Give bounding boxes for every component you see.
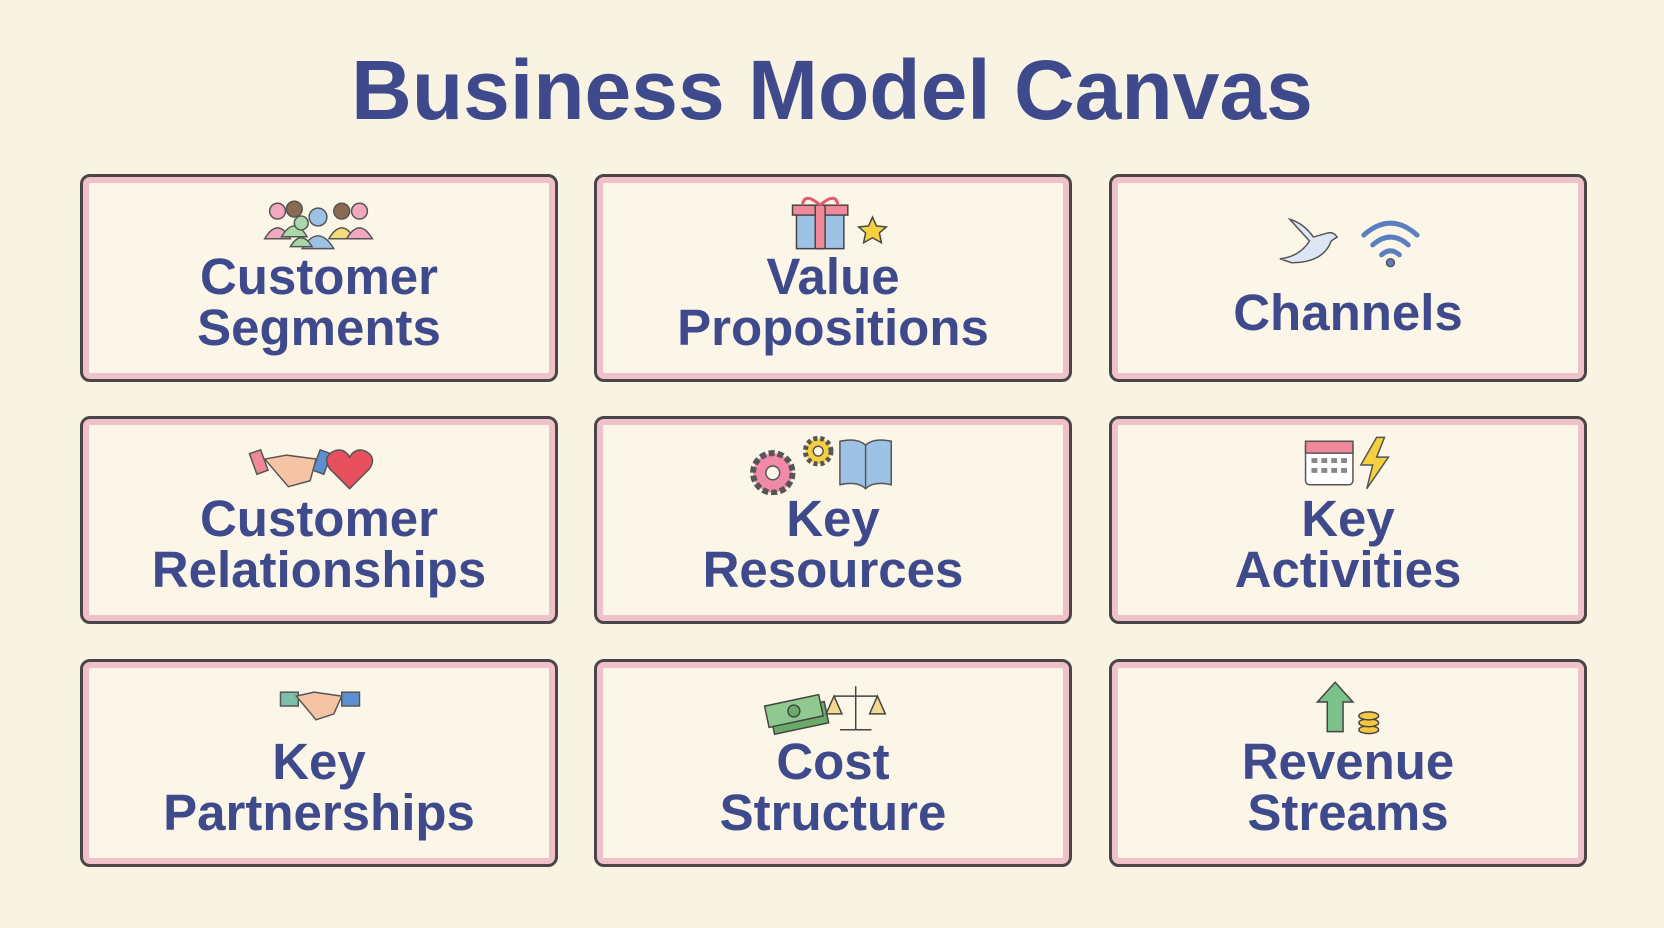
label [163, 733, 475, 841]
label: Key [786, 490, 880, 547]
label: Activities [1235, 541, 1461, 598]
label: Value [766, 248, 900, 305]
label: Partnerships [163, 784, 475, 841]
icon: handshake [280, 691, 360, 721]
label: Channels [1233, 284, 1463, 341]
label: Revenue [1242, 733, 1454, 790]
icon: arrow and coins [1316, 681, 1380, 734]
label: Cost [776, 733, 890, 790]
label: Relationships [152, 541, 486, 598]
panel: customer relationships [80, 416, 558, 624]
label [703, 490, 963, 598]
icon: gift and star [792, 196, 888, 250]
panel: key resources [594, 416, 1072, 624]
label [197, 248, 441, 356]
label: Propositions [677, 299, 989, 356]
label: Streams [1247, 784, 1449, 841]
label [1235, 490, 1461, 598]
label [1242, 733, 1454, 841]
label [152, 490, 486, 598]
label: Structure [720, 784, 946, 841]
icon: calendar and lightning [1304, 436, 1390, 490]
panel: customer segments [80, 174, 558, 382]
icon: money and scale [764, 686, 886, 736]
panel: channels [1109, 174, 1587, 382]
panel: key activities [1109, 416, 1587, 624]
label: Segments [197, 299, 441, 356]
label [720, 733, 946, 841]
icon: people [264, 200, 374, 250]
title: Business Model Canvas [351, 43, 1313, 137]
label: Customer [200, 490, 438, 547]
icon: gears and book [750, 436, 892, 495]
panel: revenue streams [1109, 659, 1587, 867]
icon: dove and wifi [1280, 218, 1420, 268]
icon: handshake and heart [248, 448, 374, 490]
label: Customer [200, 248, 438, 305]
label [677, 248, 989, 356]
panel: value propositions [594, 174, 1072, 382]
label: Resources [703, 541, 963, 598]
panel: key partnerships [80, 659, 558, 867]
label: Key [1301, 490, 1395, 547]
panel: cost structure [594, 659, 1072, 867]
label: Key [272, 733, 366, 790]
